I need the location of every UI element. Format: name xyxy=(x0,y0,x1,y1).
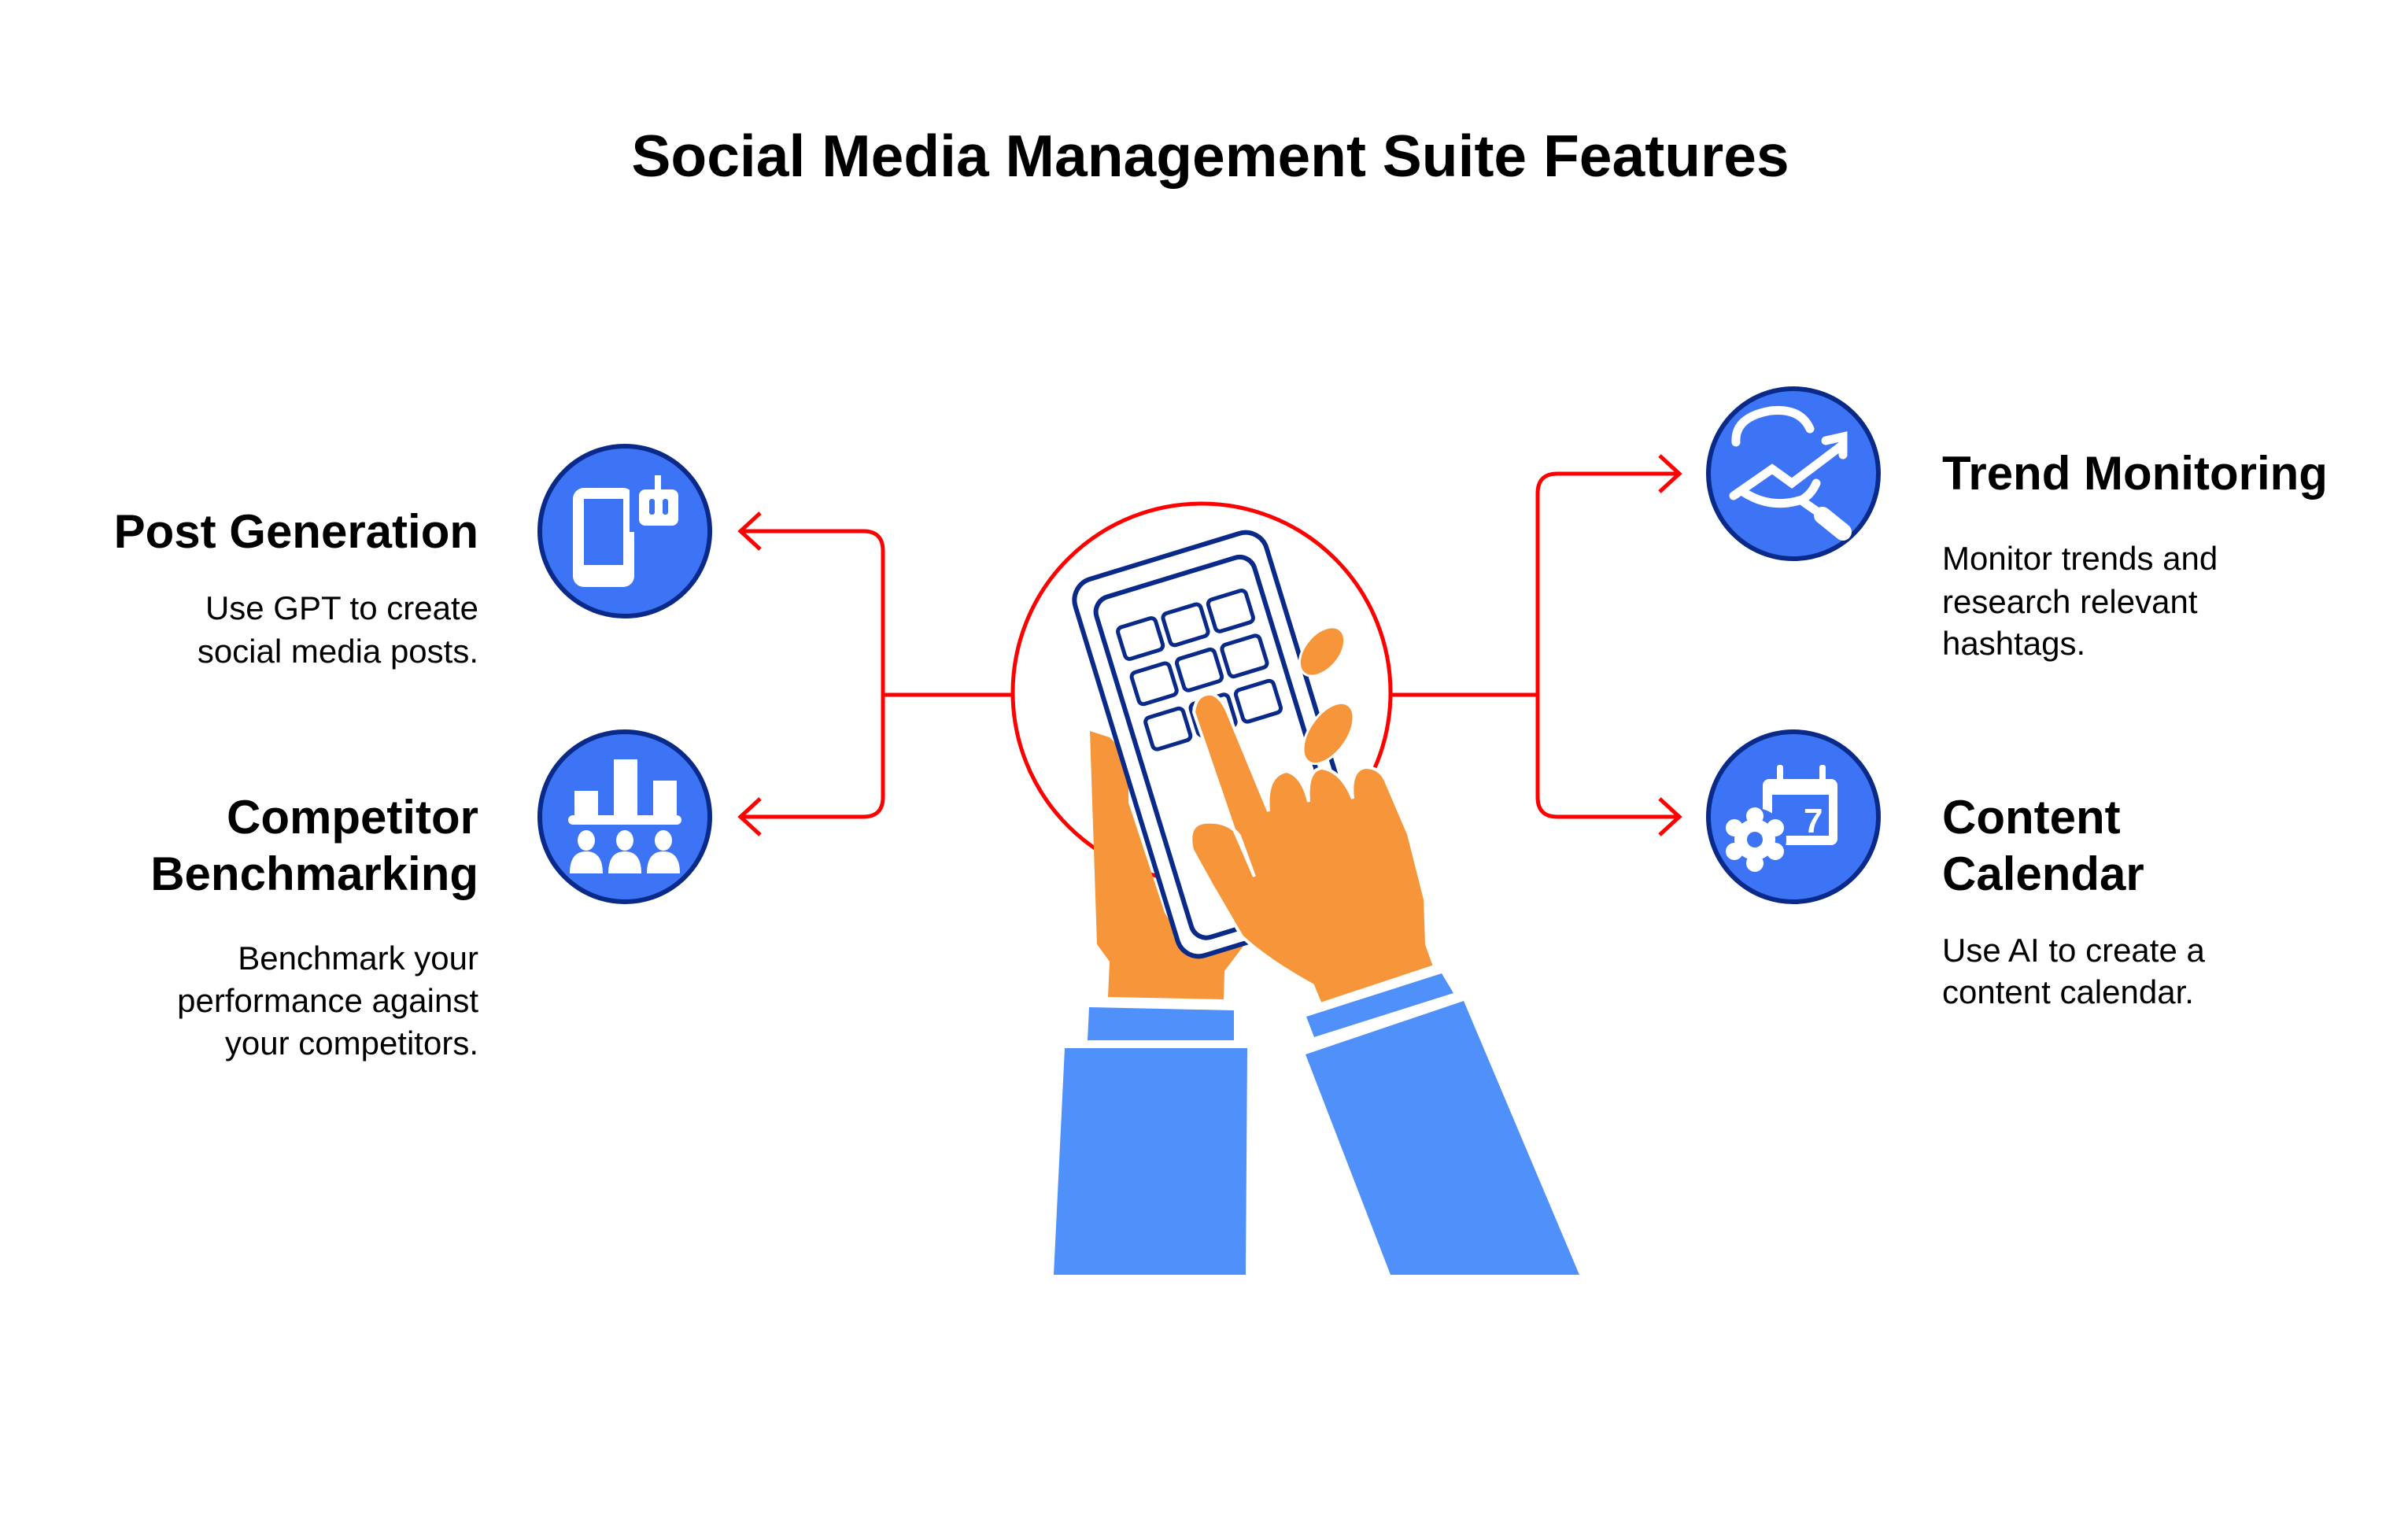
description: performance against xyxy=(177,982,478,1019)
feature: Content Calendar xyxy=(1708,732,2205,1010)
feature: Trend Monitoring xyxy=(1708,389,2328,662)
description xyxy=(198,589,478,670)
description xyxy=(177,940,478,1062)
icon: calendar with gear: 7 xyxy=(1804,802,1823,840)
heading: Benchmarking xyxy=(150,847,478,900)
heading: Competitor xyxy=(227,791,478,844)
heading: Content xyxy=(1942,791,2121,844)
left sleeve xyxy=(1054,1007,1247,1275)
icon: calendar with gear xyxy=(1708,732,1878,902)
description: Monitor trends and xyxy=(1942,540,2218,577)
description: Benchmark your xyxy=(238,940,478,977)
left hand fingers xyxy=(1291,618,1364,773)
description xyxy=(1942,932,2205,1010)
description: social media posts. xyxy=(198,633,478,670)
feature: Competitor Benchmarking xyxy=(150,732,710,1062)
icon: trend magnifier xyxy=(1708,389,1878,559)
connector: right bracket xyxy=(1389,456,1679,835)
description: Use AI to create a xyxy=(1942,932,2205,969)
description: content calendar. xyxy=(1942,973,2194,1010)
left hand xyxy=(1090,731,1246,999)
right hand xyxy=(1191,694,1435,1004)
heading: Trend Monitoring xyxy=(1942,447,2328,500)
description: Use GPT to create xyxy=(205,589,478,626)
red circle frame xyxy=(1013,504,1391,881)
heading: Calendar xyxy=(1942,847,2144,900)
icon: phone with bot xyxy=(540,446,710,616)
description xyxy=(1942,540,2218,662)
title: Social Media Management Suite Features xyxy=(631,123,1789,189)
heading: Post Generation xyxy=(114,505,478,558)
connector: left bracket xyxy=(740,513,1015,835)
icon: bar chart with people xyxy=(540,732,710,902)
description: research relevant xyxy=(1942,583,2198,620)
central illustration: hands holding phone xyxy=(1013,504,1579,1275)
phone xyxy=(1069,527,1376,962)
description: hashtags. xyxy=(1942,625,2085,662)
heading xyxy=(150,791,478,900)
feature: Post Generation xyxy=(114,446,710,670)
right sleeve xyxy=(1306,973,1579,1275)
description: your competitors. xyxy=(225,1025,478,1062)
heading xyxy=(1942,791,2144,900)
